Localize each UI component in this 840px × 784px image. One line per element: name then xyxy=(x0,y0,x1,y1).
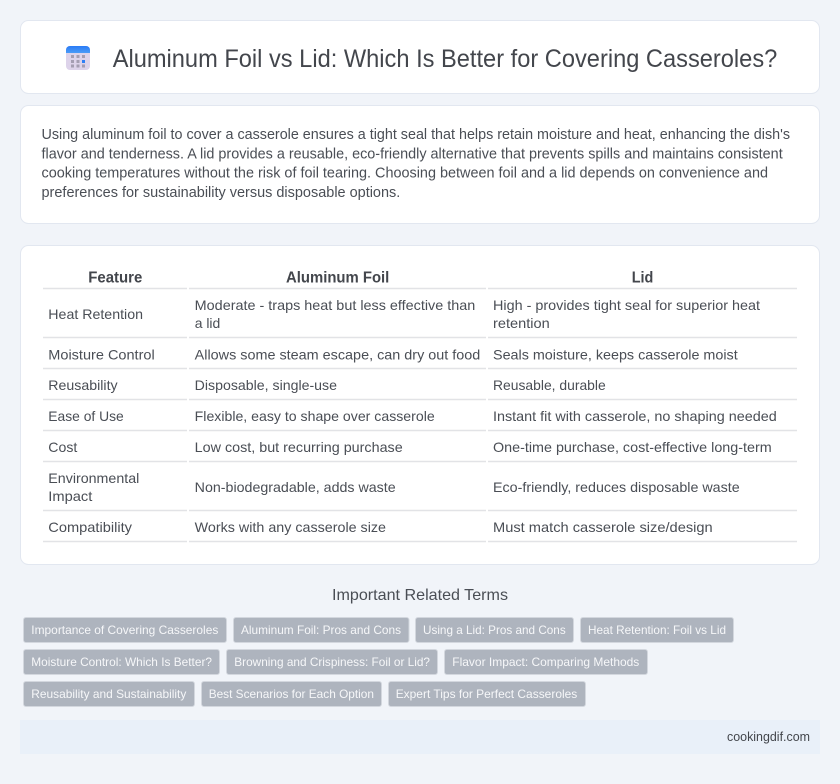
row: environmental impact xyxy=(48,470,740,504)
tag: Heat Retention: Foil vs Lid xyxy=(588,623,726,637)
table header: Feature xyxy=(88,270,143,287)
row: moisture control: Moisture Control xyxy=(48,346,155,362)
row: cost xyxy=(48,439,772,455)
text block: introduction paragraph: Using aluminum foil to cover a casserole ensures a tight seal that helps retain moisture and heat, enhancing the dish's xyxy=(42,127,790,143)
text block: introduction paragraph: cooking temperatures without the risk of foil tearing. Choosing between foil and a lid depends on convenience and xyxy=(42,166,768,182)
tag xyxy=(24,618,226,642)
row: heat retention: retention xyxy=(493,315,550,331)
tag xyxy=(24,650,220,674)
tag: Expert Tips for Perfect Casseroles xyxy=(396,687,577,701)
row: compatibility: Must match casserole size/design xyxy=(493,519,713,535)
row: heat retention: High - provides tight seal for superior heat xyxy=(493,297,760,313)
table header: Aluminum Foil xyxy=(286,270,389,287)
tag xyxy=(24,682,194,706)
row: cost: Cost xyxy=(48,439,77,455)
tag xyxy=(444,650,648,674)
row: reusability: Reusability xyxy=(48,377,118,393)
text block: introduction paragraph xyxy=(42,127,790,201)
row: compatibility: Works with any casserole size xyxy=(195,519,386,535)
row: reusability: Reusable, durable xyxy=(493,377,606,393)
heading: important related terms: Important Related Terms xyxy=(332,587,508,604)
tag xyxy=(580,618,734,642)
tag xyxy=(388,682,586,706)
tag: Browning and Crispiness: Foil or Lid? xyxy=(234,655,430,669)
row: cost: One-time purchase, cost-effective long-term xyxy=(493,439,772,455)
text block: introduction paragraph: flavor and tenderness. A lid provides a reusable, eco-friendly alternative that prevents spills and maintains consistent xyxy=(42,146,783,162)
related term tags xyxy=(24,618,734,706)
text block: introduction paragraph: preferences for sustainability versus disposable options. xyxy=(42,185,400,201)
table header: Lid xyxy=(632,270,653,287)
tag xyxy=(416,618,574,642)
icon: calendar xyxy=(66,46,90,70)
row: heat retention: a lid xyxy=(195,315,220,331)
row: environmental impact: Non-biodegradable, adds waste xyxy=(195,479,396,495)
tag: Moisture Control: Which Is Better? xyxy=(31,655,212,669)
panel: comparison table xyxy=(20,246,820,564)
row: ease of use: Flexible, easy to shape over casserole xyxy=(195,408,435,424)
tag: Flavor Impact: Comparing Methods xyxy=(452,655,639,669)
row: ease of use xyxy=(48,408,777,424)
panel: introduction xyxy=(20,106,820,224)
tag xyxy=(226,650,438,674)
row: reusability xyxy=(48,377,606,393)
row: heat retention: Moderate - traps heat but less effective than xyxy=(195,297,475,313)
row: moisture control: Seals moisture, keeps casserole moist xyxy=(493,346,738,362)
tag: Best Scenarios for Each Option xyxy=(209,687,374,701)
row: environmental impact: Impact xyxy=(48,488,92,504)
tag: Using a Lid: Pros and Cons xyxy=(423,623,566,637)
row: cost: Low cost, but recurring purchase xyxy=(195,439,403,455)
tag: Importance of Covering Casseroles xyxy=(31,623,218,637)
tag: Reusability and Sustainability xyxy=(31,687,186,701)
footer xyxy=(20,720,820,754)
row: compatibility: Compatibility xyxy=(48,519,132,535)
row: heat retention: Heat Retention xyxy=(48,306,143,322)
row: environmental impact: Eco-friendly, reduces disposable waste xyxy=(493,479,740,495)
footer: cookingdif.com xyxy=(727,730,810,744)
row: reusability: Disposable, single-use xyxy=(195,377,337,393)
row: ease of use: Ease of Use xyxy=(48,408,124,424)
row: moisture control xyxy=(48,346,738,362)
row: heat retention xyxy=(48,297,760,331)
title: Aluminum Foil vs Lid: Which Is Better for Covering Casseroles? xyxy=(113,45,777,73)
panel: header xyxy=(20,20,820,94)
table header xyxy=(88,270,653,287)
tag xyxy=(202,682,382,706)
row: environmental impact: Environmental xyxy=(48,470,139,486)
tag xyxy=(234,618,409,642)
tag: Aluminum Foil: Pros and Cons xyxy=(241,623,401,637)
row: ease of use: Instant fit with casserole, no shaping needed xyxy=(493,408,777,424)
row: moisture control: Allows some steam escape, can dry out food xyxy=(195,346,480,362)
row: compatibility xyxy=(48,519,713,535)
